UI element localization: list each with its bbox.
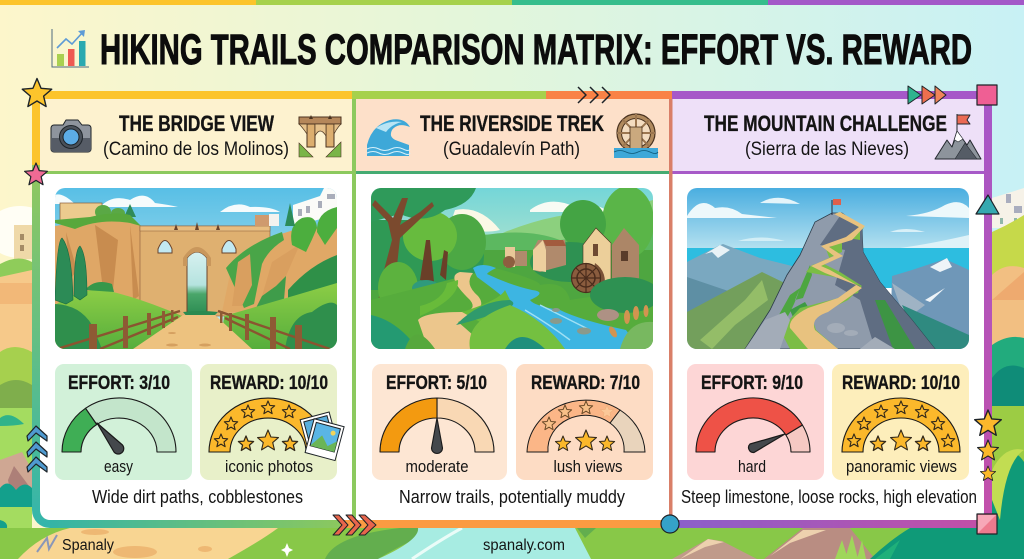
heading: THE MOUNTAIN CHALLENGE — [704, 111, 947, 136]
card: effort gauge hard: EFFORT: 9/10 — [701, 372, 803, 394]
card: reward stars iconic photos: REWARD: 10/10 — [210, 372, 328, 394]
card: effort gauge easy — [55, 364, 192, 480]
star arc 7/10 — [527, 400, 645, 452]
title with chart icon — [52, 26, 972, 74]
panel: the riverside trek — [367, 111, 660, 507]
card: reward stars lush views — [516, 364, 653, 480]
terrain note: Wide dirt paths, cobblestones — [92, 486, 303, 507]
gauge 5/10 — [380, 398, 494, 454]
star arc 10/10 — [842, 398, 960, 452]
card: reward stars panoramic views: panoramic views — [846, 457, 957, 476]
sub-heading: (Camino de los Molinos) — [103, 138, 289, 160]
illustration: summit trail — [687, 188, 969, 349]
top colour strip — [0, 0, 1024, 5]
sub-heading: (Guadalevín Path) — [443, 138, 580, 160]
terrain note: Narrow trails, potentially muddy — [399, 486, 626, 507]
card: reward stars panoramic views: REWARD: 10/10 — [842, 372, 960, 394]
heading: THE BRIDGE VIEW — [119, 111, 274, 136]
gauge 9/10 — [696, 398, 810, 453]
panel: the mountain challenge — [681, 111, 981, 507]
icon: top triangles — [908, 86, 946, 104]
decorative markers on frame — [22, 78, 1001, 535]
icon: polaroid photos — [300, 412, 344, 461]
icon: pink star — [25, 163, 47, 185]
icon: bridge — [299, 115, 341, 157]
card: effort gauge moderate: moderate — [406, 457, 468, 476]
matrix frame and panels — [32, 91, 992, 528]
card: reward stars lush views: lush views — [554, 457, 622, 476]
card: effort gauge hard: hard — [738, 457, 766, 476]
card: effort gauge hard — [687, 364, 824, 480]
icon: bottom pink square — [977, 514, 997, 534]
star arc 10/10 — [209, 398, 327, 452]
icon: mountain with flag — [935, 114, 981, 159]
illustration: bridge over gorge — [55, 188, 337, 350]
icon: wave — [367, 119, 410, 156]
icon: blue circle — [661, 515, 679, 533]
icon: red chevrons — [333, 515, 376, 535]
icon: top orange chevrons — [578, 87, 610, 103]
card: reward stars panoramic views — [832, 364, 969, 480]
icon: yellow star top left — [22, 78, 52, 107]
gauge 3/10 — [62, 398, 176, 454]
card: effort gauge moderate: EFFORT: 5/10 — [386, 372, 487, 394]
heading: THE RIVERSIDE TREK — [420, 111, 604, 136]
illustration: river path and mill — [371, 186, 660, 349]
card: effort gauge easy: easy — [104, 457, 133, 476]
icon: camera — [51, 120, 91, 152]
card: reward stars lush views: REWARD: 7/10 — [531, 372, 640, 394]
header: the mountain challenge — [704, 111, 981, 160]
icon: blue up chevrons — [27, 426, 47, 472]
icon: stacked stars — [975, 410, 1001, 480]
card: reward stars iconic photos: iconic photos — [225, 457, 313, 476]
icon: rising bar chart — [52, 29, 89, 67]
icon: pink square — [977, 85, 997, 105]
card: reward stars iconic photos — [200, 364, 344, 480]
card: effort gauge easy: EFFORT: 3/10 — [68, 372, 170, 394]
icon: teal triangle — [976, 195, 999, 214]
icon: water wheel — [614, 114, 658, 158]
footer brand — [37, 535, 565, 554]
header: the bridge view — [51, 111, 341, 160]
sub-heading: (Sierra de las Nieves) — [745, 138, 909, 160]
brand name: Spanaly — [62, 537, 114, 554]
header: the riverside trek — [367, 111, 658, 160]
panel: the bridge view — [51, 111, 344, 507]
card: effort gauge moderate — [372, 364, 507, 480]
website: spanaly.com — [483, 537, 565, 554]
icon: spanaly logo — [37, 535, 57, 552]
